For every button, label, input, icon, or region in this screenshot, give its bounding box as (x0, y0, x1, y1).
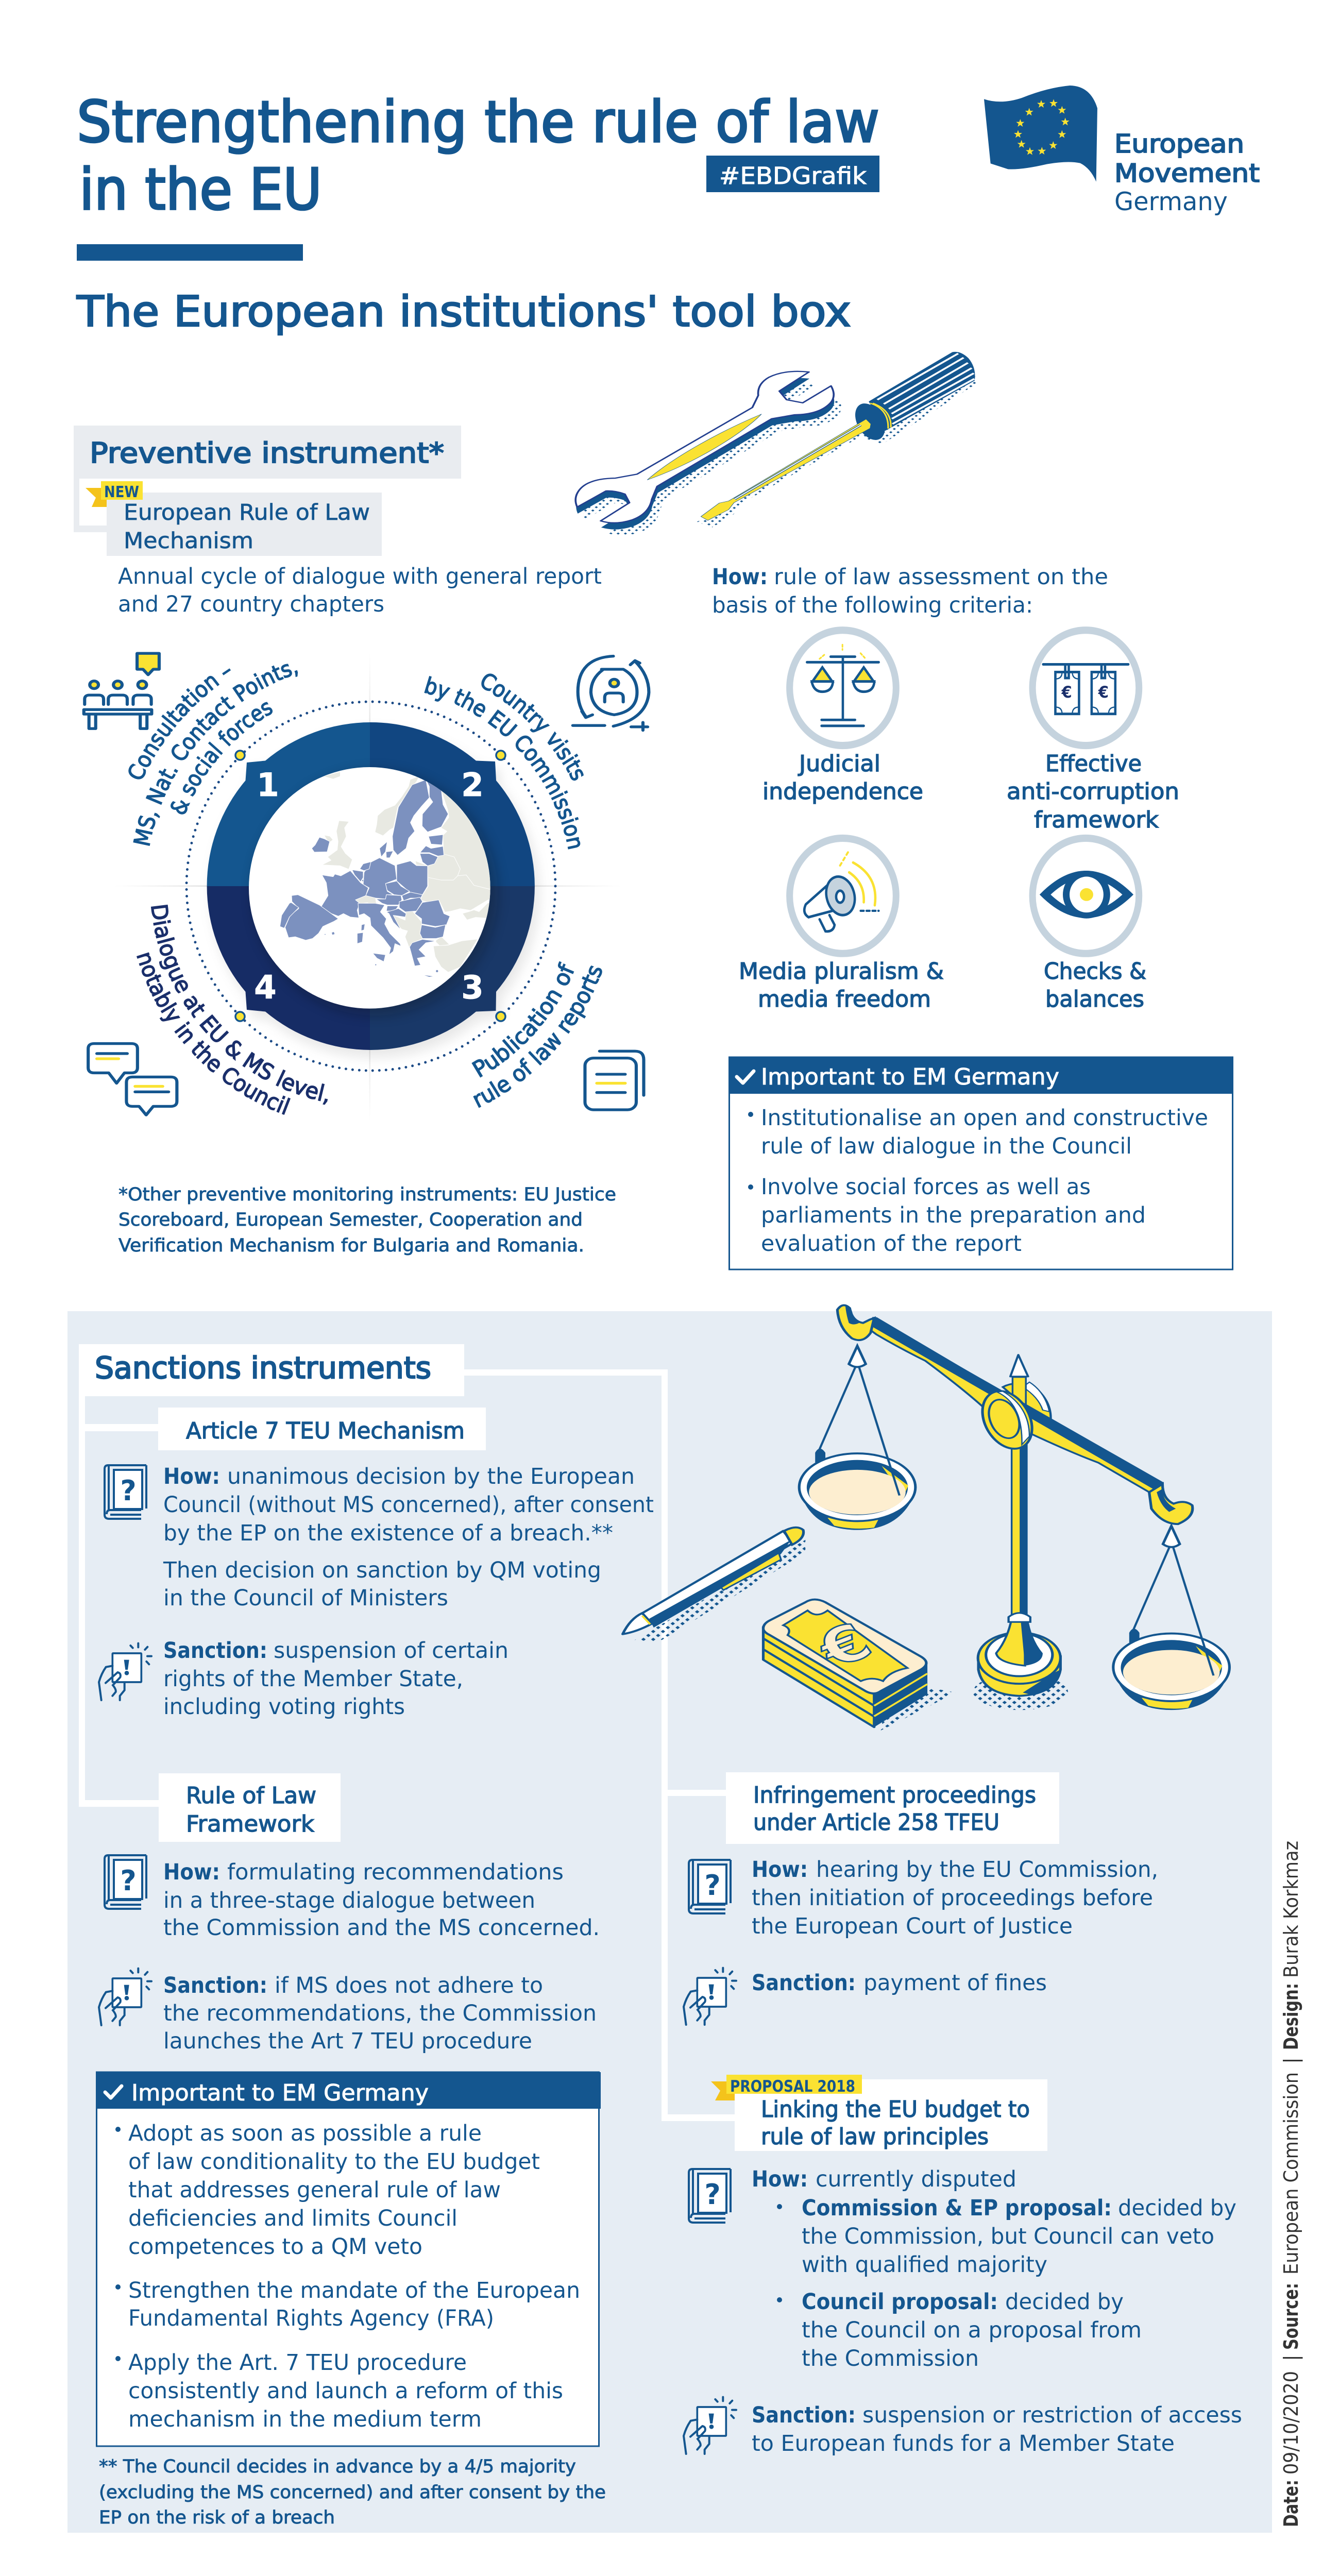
callout: important to EM Germany (sanctions): Adopt as soon as possible a rule (128, 2121, 482, 2146)
text: how assessment criteria: basis of the following criteria: (712, 592, 1033, 618)
step numbers: 4 (254, 969, 277, 1006)
title: in the EU (79, 157, 322, 223)
callout: important to EM Germany (sanctions): Strengthen the mandate of the European (128, 2278, 580, 2303)
label: Linking the EU budget: rule of law principles (761, 2124, 989, 2150)
icon: book (689, 2169, 731, 2223)
text: linking how: How: (752, 2166, 808, 2192)
callout: important to EM Germany (sanctions): of law conditionality to the EU budget (128, 2149, 540, 2175)
curved label: step 4: Dialogue at EU & MS level, (150, 905, 328, 1105)
callout: important to EM Germany (preventive): evaluation of the report (761, 1231, 1022, 1257)
criteria labels: framework (1034, 807, 1159, 833)
text: linking how: decided by (1118, 2195, 1236, 2221)
step numbers: 3 (461, 969, 484, 1006)
curved label: step 4: notably in the Council (137, 952, 291, 1115)
callout: important to EM Germany (sanctions): mechanism in the medium term (128, 2406, 482, 2432)
text: framework how: the Commission and the MS concerned. (163, 1915, 600, 1941)
right pan (1113, 1526, 1229, 1710)
label: Linking the EU budget: Linking the EU budget to (761, 2096, 1030, 2123)
ring quadrants (206, 721, 535, 1051)
text: framework sanction: if MS does not adhere to (275, 1973, 543, 1998)
text: linking how: the Commission, but Council can veto (802, 2224, 1214, 2249)
text: Article 7 how (163, 1464, 654, 1611)
title (77, 89, 879, 223)
text: Article 7 how: Council (without MS concerned), after consent (163, 1492, 654, 1518)
text: infringement how: hearing by the EU Commission, (816, 1857, 1158, 1883)
icon: hand with card (684, 1968, 736, 2025)
text: linking sanction: to European funds for a Member State (752, 2431, 1175, 2456)
icon: anti-corruption banknotes: € (1061, 683, 1072, 702)
PROPOSAL 2018 badge (711, 2075, 862, 2100)
European Rule of Law Mechanism label (107, 493, 382, 556)
screwdriver (697, 352, 976, 527)
callout: important to EM Germany (sanctions): that addresses general rule of law (128, 2177, 501, 2203)
yellow dots (235, 751, 505, 1021)
map of Europe (249, 767, 495, 1009)
credits: date, source, design: | (1280, 2354, 1303, 2361)
credits: date, source, design: European Commission (1280, 2072, 1302, 2275)
logo: European Movement Germany: Germany (1114, 187, 1228, 216)
text: linking how (752, 2166, 1236, 2371)
illustration: euro banknotes (763, 1600, 956, 1731)
illustration: pen (623, 1528, 805, 1642)
text: framework sanction: launches the Art 7 TEU procedure (163, 2028, 532, 2054)
footnote: council decides (99, 2456, 606, 2528)
curved label: step 3: Publication of (471, 961, 574, 1078)
icon: book (105, 1465, 146, 1519)
text: framework how: How: (163, 1859, 220, 1885)
criteria labels: media freedom (758, 986, 931, 1012)
credits: date, source, design: Date: (1280, 2480, 1302, 2527)
footnote: council decides: ** The Council decides in advance by a 4/5 majority (99, 2456, 576, 2477)
text: linking how: Commission & EP proposal: (802, 2195, 1112, 2221)
subtitle: The European institutions' tool box (76, 287, 851, 336)
text: infringement sanction (752, 1970, 1047, 1996)
European Rule of Law Mechanism label: European Rule of Law (124, 500, 370, 526)
step numbers: 1 (257, 766, 279, 804)
curved label: step 2: Country visits (481, 673, 584, 781)
criteria labels: Effective (1045, 751, 1142, 777)
icon: book: ? (704, 2178, 721, 2211)
criteria labels (739, 751, 1179, 1012)
beam (837, 1305, 1193, 1524)
text: linking how: the Commission (802, 2346, 979, 2371)
criteria labels: balances (1045, 986, 1144, 1012)
icon: hand with card (684, 2397, 736, 2454)
icon: hand with card (99, 1643, 151, 1700)
icon: book (105, 1855, 146, 1909)
criteria labels: independence (762, 778, 923, 805)
text: infringement how: the European Court of Justice (752, 1913, 1073, 1939)
curved label: step 1: MS, Nat. Contact Points, (133, 664, 298, 846)
icon: hand with card (99, 1969, 151, 2025)
pole (1003, 1355, 1051, 1622)
text: linking sanction: suspension or restriction of access (862, 2402, 1242, 2428)
curved label: step 2: by the EU Commission (424, 676, 580, 850)
text: linking how: the Council on a proposal from (802, 2317, 1142, 2343)
icon: book (689, 1860, 731, 1913)
text: framework sanction: the recommendations, the Commission (163, 2001, 597, 2026)
icon: megaphone (790, 838, 896, 954)
icon: anti-corruption banknotes (1032, 630, 1139, 745)
footnote: other preventive instruments (118, 1184, 616, 1256)
text: linking sanction (752, 2402, 1242, 2456)
chart: rule of law cycle (128, 664, 602, 1115)
icon: report document (585, 1051, 643, 1110)
panel: sanctions instruments (67, 1311, 1272, 2533)
text: Article 7 how: How: (163, 1464, 220, 1489)
footnote: other preventive instruments: *Other preventive monitoring instruments: EU Justice (118, 1184, 616, 1205)
label: Article 7 TEU Mechanism (158, 1408, 486, 1450)
logo: European Movement Germany: European (1114, 129, 1244, 159)
logo: European Movement Germany (984, 86, 1260, 216)
text: framework sanction (163, 1973, 597, 2054)
icon: EU flag (984, 86, 1097, 182)
footnote: other preventive instruments: Scoreboard, European Semester, Cooperation and (118, 1210, 583, 1230)
text: Article 7 how: Then decision on sanction by QM voting (163, 1557, 601, 1583)
text: infringement how: How: (752, 1857, 808, 1883)
label: Infringement proceedings: Infringement proceedings (753, 1782, 1036, 1808)
text: how assessment criteria (712, 564, 1108, 618)
icon: anti-corruption banknotes: € (1098, 683, 1109, 702)
hashtag badge (706, 156, 879, 192)
callout: important to EM Germany (preventive) (728, 1057, 1233, 1269)
callout: important to EM Germany (sanctions): consistently and launch a reform of this (128, 2378, 563, 2404)
callout: important to EM Germany (preventive): Involve social forces as well as (761, 1174, 1091, 1200)
label: Article 7 TEU Mechanism: Article 7 TEU Mechanism (186, 1418, 465, 1444)
credits: date, source, design: Source: (1280, 2283, 1302, 2350)
text: how assessment criteria: rule of law assessment on the (774, 564, 1108, 590)
text: linking how: Council proposal: (802, 2289, 998, 2315)
callout: important to EM Germany (sanctions): competences to a QM veto (128, 2234, 422, 2260)
text: framework how: formulating recommendations (227, 1859, 564, 1885)
icon: judicial scales (790, 630, 896, 745)
curved label: step 1: Consultation – (128, 668, 231, 779)
base (973, 1619, 1068, 1710)
text: infringement sanction: Sanction: (752, 1970, 856, 1996)
label: Rule of Law Framework: Rule of Law (186, 1783, 316, 1809)
credits: date, source, design: Design: (1280, 1983, 1302, 2050)
icon: book: ? (704, 1869, 721, 1902)
title underline bar (77, 244, 303, 261)
NEW badge (86, 481, 143, 507)
icon: book: ? (120, 1865, 137, 1897)
title: Strengthening the rule of law (77, 89, 879, 156)
heading: Sanctions instruments (95, 1350, 431, 1385)
callout: important to EM Germany (sanctions): Apply the Art. 7 TEU procedure (128, 2350, 467, 2376)
label: Infringement proceedings (726, 1772, 1059, 1844)
label: Rule of Law Framework: Framework (186, 1811, 315, 1837)
callout: important to EM Germany (sanctions) (96, 2072, 601, 2446)
icon: eye (1032, 838, 1139, 954)
callout: important to EM Germany (preventive): rule of law dialogue in the Council (761, 1133, 1132, 1159)
text: Article 7 sanction: rights of the Member State, (163, 1666, 463, 1692)
text: Article 7 how: by the EP on the existence of a breach.** (163, 1520, 613, 1546)
curved label: step 3: rule of law reports (473, 965, 602, 1108)
footnote: other preventive instruments: Verification Mechanism for Bulgaria and Romania. (118, 1235, 584, 1256)
label: Rule of Law Framework (159, 1773, 341, 1842)
illustration: euro banknotes: € (805, 1612, 884, 1680)
text: linking how: decided by (1005, 2289, 1124, 2315)
text: framework how: in a three-stage dialogue between (163, 1888, 535, 1913)
footnote: council decides: EP on the risk of a breach (99, 2507, 335, 2528)
criteria labels: Checks & (1044, 958, 1146, 985)
callout: important to EM Germany (preventive): Important to EM Germany (761, 1064, 1059, 1090)
text: framework how (163, 1859, 600, 1941)
text: Article 7 how: unanimous decision by the European (227, 1464, 635, 1489)
text: infringement how: then initiation of proceedings before (752, 1885, 1153, 1911)
text: Article 7 how: in the Council of Ministers (163, 1585, 448, 1611)
illustration: balance scale (799, 1305, 1229, 1710)
text: Article 7 sanction (163, 1638, 509, 1720)
icon: meeting table (84, 653, 159, 728)
text: linking how: currently disputed (816, 2166, 1016, 2192)
wrench (575, 371, 841, 535)
icon: country visit cycle (573, 656, 649, 731)
panel: preventive instrument heading (74, 426, 461, 532)
European Rule of Law Mechanism label: Mechanism (124, 528, 253, 554)
criteria labels: Judicial (798, 751, 880, 777)
text: annual cycle: and 27 country chapters (118, 591, 384, 617)
illustration: wrench and screwdriver (575, 352, 976, 535)
label: Linking the EU budget (735, 2079, 1047, 2151)
curved label: step 1: & social forces (171, 702, 273, 815)
logo: European Movement Germany: Movement (1114, 159, 1260, 188)
text: Article 7 sanction: Sanction: (163, 1638, 267, 1664)
credits: date, source, design: | (1280, 2057, 1303, 2064)
text: how assessment criteria: How: (712, 564, 768, 590)
label: Infringement proceedings: under Article 258 TFEU (753, 1809, 999, 1836)
credits: date, source, design: 09/10/2020 (1280, 2371, 1302, 2475)
text: linking sanction: Sanction: (752, 2402, 856, 2428)
callout: important to EM Germany (sanctions): deficiencies and limits Council (128, 2206, 457, 2231)
step numbers (254, 766, 484, 1006)
callout: important to EM Germany (preventive): Institutionalise an open and constructive (761, 1105, 1208, 1131)
PROPOSAL 2018 badge: PROPOSAL 2018 (730, 2077, 855, 2096)
step numbers: 2 (461, 766, 484, 804)
text: Article 7 sanction: suspension of certain (274, 1638, 509, 1664)
left pan (799, 1346, 916, 1530)
text: framework sanction: Sanction: (163, 1973, 267, 1998)
callout: important to EM Germany (preventive): parliaments in the preparation and (761, 1202, 1146, 1228)
hashtag badge: #EBDGrafik (719, 162, 867, 190)
credits: date, source, design: Burak Korkmaz (1280, 1841, 1302, 1978)
callout: important to EM Germany (sanctions): Fundamental Rights Agency (FRA) (128, 2306, 494, 2331)
criteria labels: Media pluralism & (739, 958, 944, 985)
criteria icons (790, 630, 1139, 954)
text: linking how: with qualified majority (802, 2252, 1047, 2278)
footnote: council decides: (excluding the MS concerned) and after consent by the (99, 2482, 606, 2503)
text: infringement sanction: payment of fines (863, 1970, 1047, 1996)
text: infringement how (752, 1857, 1158, 1939)
text: annual cycle: Annual cycle of dialogue with general report (118, 564, 602, 589)
credits: date, source, design (1280, 1841, 1303, 2527)
icon: book: ? (120, 1475, 137, 1507)
callout: important to EM Germany (sanctions): Important to EM Germany (131, 2080, 429, 2106)
NEW badge: NEW (104, 483, 139, 501)
cycle icons (84, 653, 649, 1115)
heading (79, 1344, 464, 1396)
text: Article 7 sanction: including voting rights (163, 1694, 405, 1720)
criteria labels: anti-corruption (1007, 778, 1179, 805)
panel: preventive instrument heading: Preventive instrument* (90, 437, 444, 469)
text: annual cycle (118, 564, 602, 617)
icon: dialogue bubbles (88, 1044, 177, 1115)
